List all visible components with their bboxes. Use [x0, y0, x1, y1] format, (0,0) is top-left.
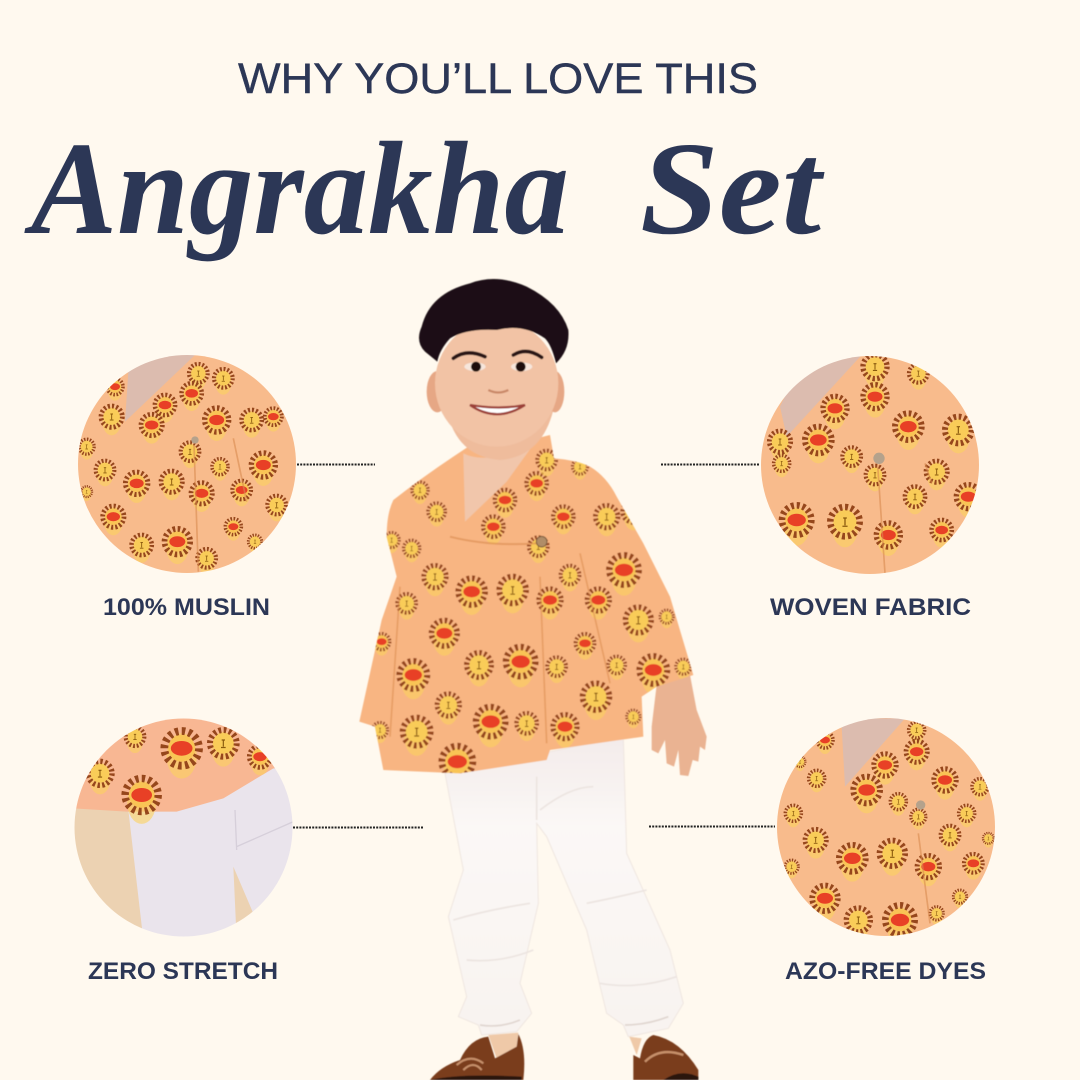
circle image: zero stretch close-up [74, 718, 292, 936]
label: 100% muslin: 100% MUSLIN [103, 594, 270, 621]
label: zero stretch: ZERO STRETCH [88, 958, 278, 985]
heading: why you'll love this: WHY YOU’LL LOVE THIS [238, 55, 758, 103]
connector: woven fabric to shirt [661, 464, 759, 466]
wooden button [536, 536, 547, 547]
title: Angrakha Set [24, 114, 825, 262]
panel: woven fabric detail [761, 356, 979, 615]
panel: 100% muslin detail [78, 355, 296, 615]
pants [445, 737, 683, 1037]
title: Angrakha Set: Set [640, 114, 825, 262]
shoes [430, 1033, 698, 1080]
connector: zero stretch to pants [293, 826, 423, 828]
circle image: azo-free dyes close-up [777, 718, 995, 936]
hand [652, 675, 707, 776]
label: woven fabric: WOVEN FABRIC [770, 594, 971, 621]
head [419, 279, 569, 460]
shirt with lion print [359, 435, 693, 789]
panel: azo-free dyes detail [777, 718, 995, 979]
boy figure in angrakha set [359, 279, 707, 1080]
hair [419, 279, 569, 363]
shirt in circle [76, 718, 275, 812]
circle image: muslin close-up [78, 355, 296, 573]
panel: zero stretch detail [74, 718, 292, 979]
title: Angrakha Set: Angrakha [24, 114, 569, 262]
connector: azo-free dyes to pants [649, 826, 775, 828]
connector: muslin to shirt [297, 464, 375, 466]
circle image: woven fabric close-up [761, 356, 979, 574]
label: azo-free dyes: AZO-FREE DYES [785, 958, 986, 985]
neck [463, 440, 537, 522]
pants in circle [128, 763, 297, 940]
